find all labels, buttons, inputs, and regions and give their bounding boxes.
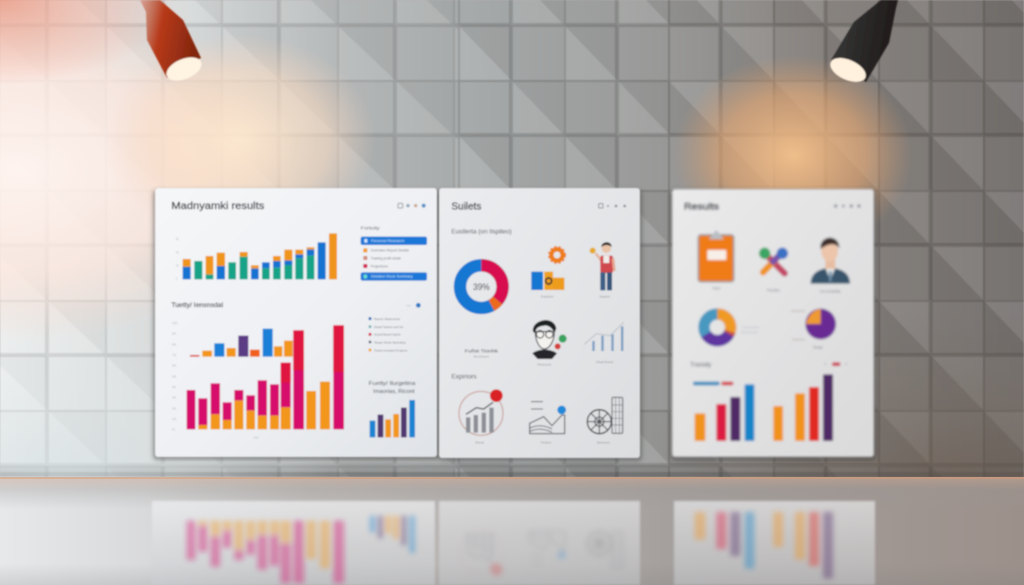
bar chart <box>695 374 833 441</box>
panel: Suilets icons <box>439 188 640 458</box>
legend: Actual Result Spirits <box>374 333 401 337</box>
icon: gear and blocks <box>531 247 565 299</box>
chart axis labels <box>172 322 259 439</box>
subheading: Trastaly <box>690 362 711 368</box>
pie chart <box>791 309 836 349</box>
icon: standing person <box>590 242 614 299</box>
legend: Detail Towers and No <box>374 325 404 329</box>
stacked bar chart: 20 <box>176 266 179 268</box>
chart axis labels: 700 <box>172 354 177 357</box>
lamp: red spotlight <box>140 0 205 85</box>
icon: man in suit: Accountability <box>820 289 841 293</box>
icon: open book with arrow <box>530 402 566 434</box>
chart axis labels: 900 <box>172 333 177 336</box>
icon: avatar with glasses: Personnel <box>538 363 551 367</box>
toolbar icons <box>599 204 626 208</box>
chart axis labels: 800 <box>172 343 177 346</box>
sidebar list: Overview Report Details <box>371 249 409 253</box>
stacked bar chart: 40 <box>176 252 179 254</box>
bottom icon captions: Product <box>541 441 551 445</box>
chart axis labels: 400 <box>172 386 177 389</box>
lamp: black spotlight <box>827 0 898 87</box>
legend <box>368 303 421 352</box>
stacked bar chart <box>176 233 337 281</box>
legend: Report Statements <box>374 317 401 321</box>
icon: line and bar mini chart: Detail Result <box>596 360 613 364</box>
panel shadows <box>153 190 876 461</box>
donut chart: 39% <box>473 282 490 292</box>
legend: Ticket Invested Projects <box>374 348 408 352</box>
reflective floor <box>0 477 1024 585</box>
cool and warm shading on the lower wall <box>0 270 1024 477</box>
icon: growth chart circle <box>459 389 503 435</box>
legend pills <box>693 362 847 385</box>
chart axis labels: 50 <box>172 429 175 432</box>
small bar chart <box>370 400 415 437</box>
stacked bar chart: 0 <box>176 279 178 281</box>
chart axis labels: 300 <box>172 397 177 400</box>
icon: wheel and grid tower <box>587 397 623 434</box>
callout heading: Fuetty/ Ilurgetina <box>369 381 416 387</box>
icon: crossed tools <box>759 248 788 292</box>
icon: avatar with glasses <box>532 320 567 367</box>
sidebar list: Detailed Stock Summary <box>371 275 413 279</box>
bottom icons <box>459 389 623 435</box>
panel: Madnyamki results dashboard <box>155 188 437 457</box>
icon: gear and blocks: Snapshot <box>541 295 553 299</box>
sidebar list: Trading profit detail <box>371 256 401 260</box>
grouped bar chart <box>187 325 344 429</box>
warm light glow on wall from the left <box>0 0 375 340</box>
warm spotlight glow on wall at right <box>673 55 913 255</box>
chart axis labels: 100 <box>172 418 177 421</box>
panel: Results <box>672 189 874 457</box>
icon: man in suit <box>811 238 850 293</box>
stacked bar chart: 50 <box>176 239 179 241</box>
chart axis labels: 200 <box>172 407 177 410</box>
sidebar list: Personal Research <box>371 239 404 243</box>
toolbar icons <box>834 204 861 208</box>
toolbar icons <box>398 203 426 208</box>
icon: crossed tools: Priorities <box>767 288 780 292</box>
title: Madnyamki results <box>171 201 264 212</box>
section heading: Expiriors <box>451 375 477 381</box>
reflected chart bars <box>187 512 833 583</box>
donut chart <box>460 265 503 308</box>
sidebar list <box>361 237 427 281</box>
donut label: Fufist Tionhk <box>465 349 499 355</box>
chart axis labels: 500 <box>172 375 177 378</box>
pie chart: Range <box>813 345 823 349</box>
callout subheading: Imaorias, Ricont <box>373 389 415 395</box>
legend: Target Stock Spending <box>374 340 406 344</box>
donut chart <box>704 314 760 341</box>
sidebar heading: Fortuity <box>361 225 380 230</box>
icon: standing person: Support <box>599 295 610 299</box>
subheading: Tuetty/ Iensnsdal <box>171 302 223 309</box>
chart axis labels: 600 <box>172 365 177 368</box>
subheading: Eustlerta (on Ilspiteo) <box>451 229 512 235</box>
title: Suilets <box>451 202 481 213</box>
sidebar list: Projections <box>371 264 388 268</box>
icon: clipboard: Fleet <box>713 287 720 291</box>
icon: clipboard <box>698 230 734 291</box>
legend: Year <box>406 304 411 307</box>
bottom icon captions <box>475 441 610 445</box>
bottom icon captions: Measures <box>597 441 610 445</box>
chart axis labels: 1000 <box>172 322 178 325</box>
reflected panels on floor <box>152 501 875 585</box>
donut sublabel: Bookback <box>474 354 490 358</box>
icon: line and bar mini chart <box>584 322 624 364</box>
chart axis labels: Year <box>253 436 259 439</box>
bottom icon captions: Result <box>475 441 484 445</box>
title: Results <box>684 202 719 212</box>
